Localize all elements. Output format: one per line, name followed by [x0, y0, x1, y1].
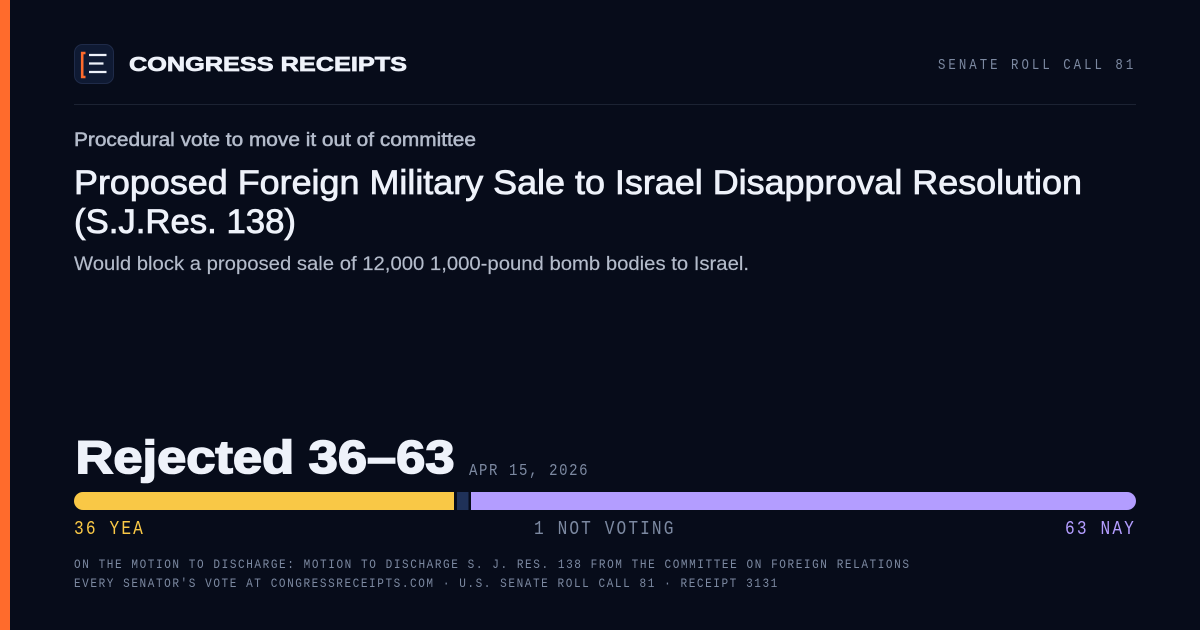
nay segment: [471, 492, 1136, 510]
vote bar: [74, 492, 1136, 510]
description: Would block a proposed sale of 12,000 1,000-pound bomb bodies to Israel.: [74, 253, 749, 275]
kicker: Procedural vote to move it out of committee: [74, 130, 476, 151]
icon: logo: [74, 44, 114, 84]
title: Proposed Foreign Military Sale to Israel Disapproval Resolution: [74, 164, 1082, 202]
accent bar: [0, 0, 10, 630]
title: [74, 164, 1082, 241]
footer text: EVERY SENATOR'S VOTE AT CONGRESSRECEIPTS.COM · U.S. SENATE ROLL CALL 81 · RECEIPT 3131: [74, 576, 777, 591]
date: APR 15, 2026: [469, 461, 588, 480]
brand name: CONGRESS RECEIPTS: [129, 53, 407, 76]
footer text: ON THE MOTION TO DISCHARGE: MOTION TO DISCHARGE S. J. RES. 138 FROM THE COMMITTEE ON FOREIGN RELATIONS: [74, 557, 909, 572]
result headline: Rejected 36–63: [76, 431, 454, 483]
header: [74, 44, 1133, 84]
title: (S.J.Res. 138): [74, 203, 296, 241]
yea label: 36 YEA: [74, 519, 143, 540]
nay label: 63 NAY: [1065, 519, 1134, 540]
not voting segment: [457, 492, 468, 510]
roll call label: SENATE ROLL CALL 81: [938, 58, 1133, 74]
yea segment: [74, 492, 454, 510]
not voting label: 1 NOT VOTING: [534, 519, 673, 540]
footer text: [74, 557, 909, 591]
